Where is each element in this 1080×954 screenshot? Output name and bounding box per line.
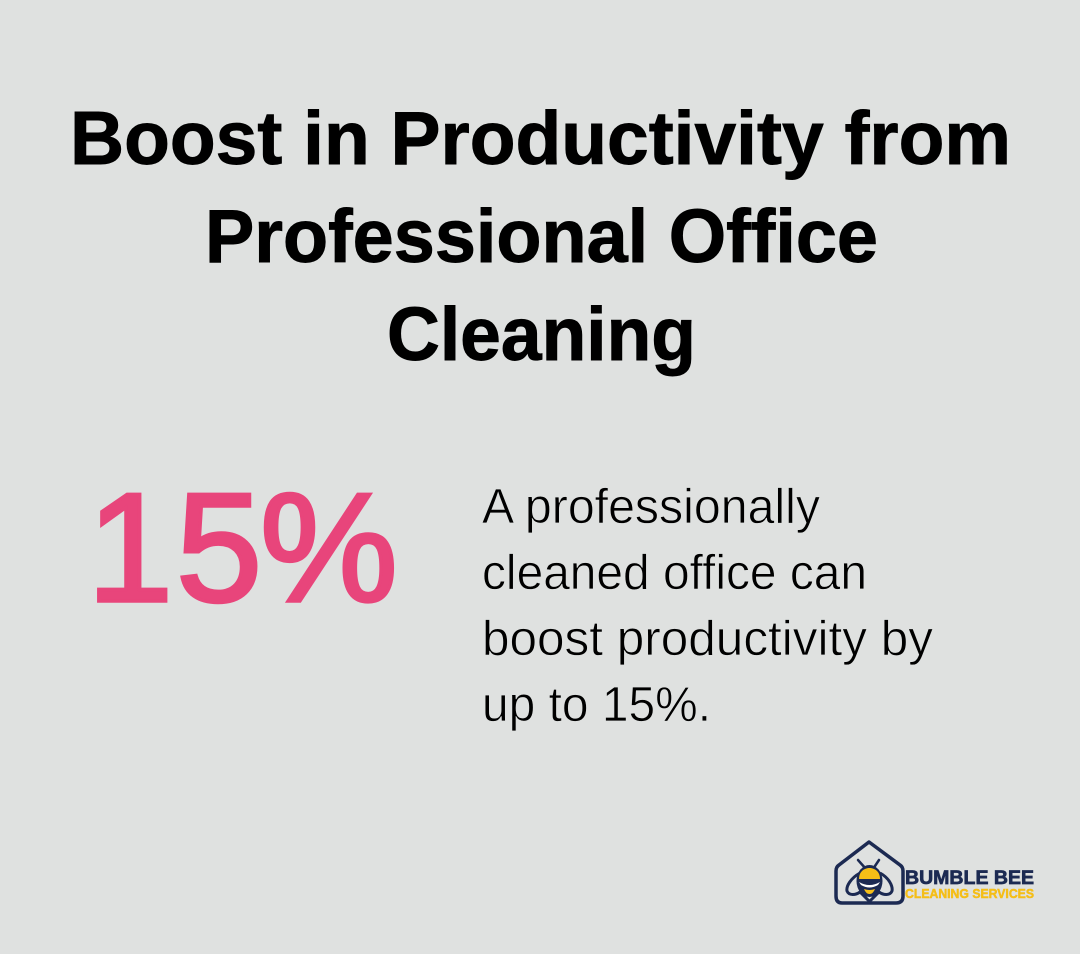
title: Professional Office xyxy=(205,194,878,278)
title xyxy=(70,96,1011,376)
description text xyxy=(482,480,934,732)
title: Cleaning xyxy=(387,292,696,376)
logo tagline: CLEANING SERVICES xyxy=(905,887,1034,901)
description text: cleaned office can xyxy=(482,546,867,600)
big statistic: 15%: 15% xyxy=(87,461,398,634)
logo: Bumble Bee Cleaning Services xyxy=(836,842,1034,903)
description text: up to 15%. xyxy=(482,678,711,732)
description text: boost productivity by xyxy=(482,612,934,666)
title: Boost in Productivity from xyxy=(70,96,1011,180)
description text: A professionally xyxy=(482,480,820,534)
logo wordmark: BUMBLE BEE xyxy=(905,868,1034,889)
icon: bee xyxy=(847,860,892,902)
icon: house outline xyxy=(836,842,903,903)
